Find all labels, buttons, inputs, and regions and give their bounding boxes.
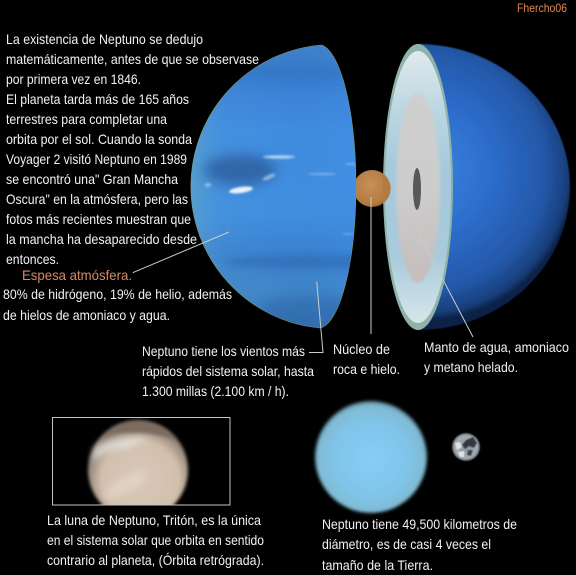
intro text block: entonces. [6, 251, 59, 267]
atmosphere label [3, 267, 232, 323]
Triton caption: La luna de Neptuno, Tritón, es la única [47, 512, 261, 528]
planet core sphere [354, 170, 390, 207]
Triton caption: en el sistema solar que orbita en sentido [47, 532, 264, 548]
intro text block: El planeta tarda más de 165 años [6, 91, 189, 107]
mantle ring [385, 51, 451, 323]
intro text block: La existencia de Neptuno se dedujo [6, 31, 203, 47]
intro text block: Voyager 2 visitó Neptuno en 1989 [6, 151, 187, 167]
size caption: Neptuno tiene 49,500 kilometros de [322, 516, 517, 532]
core label: Núcleo de [333, 341, 390, 357]
size caption: diámetro, es de casi 4 veces el [322, 536, 491, 552]
dark spot [204, 155, 276, 185]
intro text block: se encontró una" Gran Mancha [6, 171, 178, 187]
Triton image panel [52, 417, 230, 506]
intro text block: Oscura" en la atmósfera, pero las [6, 191, 188, 207]
intro text block: terrestres para completar una [6, 111, 167, 127]
upper dark band [240, 62, 343, 80]
size caption [322, 516, 517, 573]
mantle label [424, 339, 569, 375]
winds label: rápidos del sistema solar, hasta [142, 363, 314, 379]
core sphere overlap [383, 174, 391, 204]
atmosphere rim [383, 44, 453, 330]
intro text block [6, 31, 259, 267]
core label [333, 341, 400, 377]
Triton caption [47, 512, 264, 568]
intro text block: fotos más recientes muestran que [6, 211, 191, 227]
core label: roca e hielo. [333, 361, 400, 377]
Triton caption: contrario al planeta, (Órbita retrógrada). [47, 552, 264, 568]
credit: Fhercho06: Fhercho06 [517, 1, 567, 15]
intro text block: matemáticamente, antes de que se observase [6, 51, 259, 67]
right hemisphere of Neptune, cut open [383, 44, 570, 330]
pointer lines [133, 197, 473, 352]
Triton moon [88, 420, 188, 520]
winds label: 1.300 millas (2.100 km / h). [142, 383, 289, 399]
left hemisphere of Neptune [190, 44, 356, 328]
intro text block: por primera vez en 1846. [6, 71, 141, 87]
winds label: Neptuno tiene los vientos más [142, 343, 305, 359]
Neptune size comparison sphere [315, 401, 427, 513]
cut core [413, 168, 421, 210]
winds label [142, 343, 314, 399]
atmosphere label: de hielos de amoniaco y agua. [3, 307, 170, 323]
size caption: tamaño de la Tierra. [322, 557, 433, 573]
Earth [452, 433, 480, 461]
lower dark band [230, 254, 352, 270]
mantle label: y metano helado. [424, 359, 518, 375]
white clouds [204, 155, 359, 235]
intro text block: orbita por el sol. Cuando la sonda [6, 131, 192, 147]
atmosphere label: 80% de hidrógeno, 19% de helio, además [3, 286, 232, 302]
ice mantle [396, 93, 440, 283]
atmosphere label: Espesa atmósfera. [22, 267, 132, 283]
intro text block: la mancha ha desaparecido desde [6, 231, 197, 247]
